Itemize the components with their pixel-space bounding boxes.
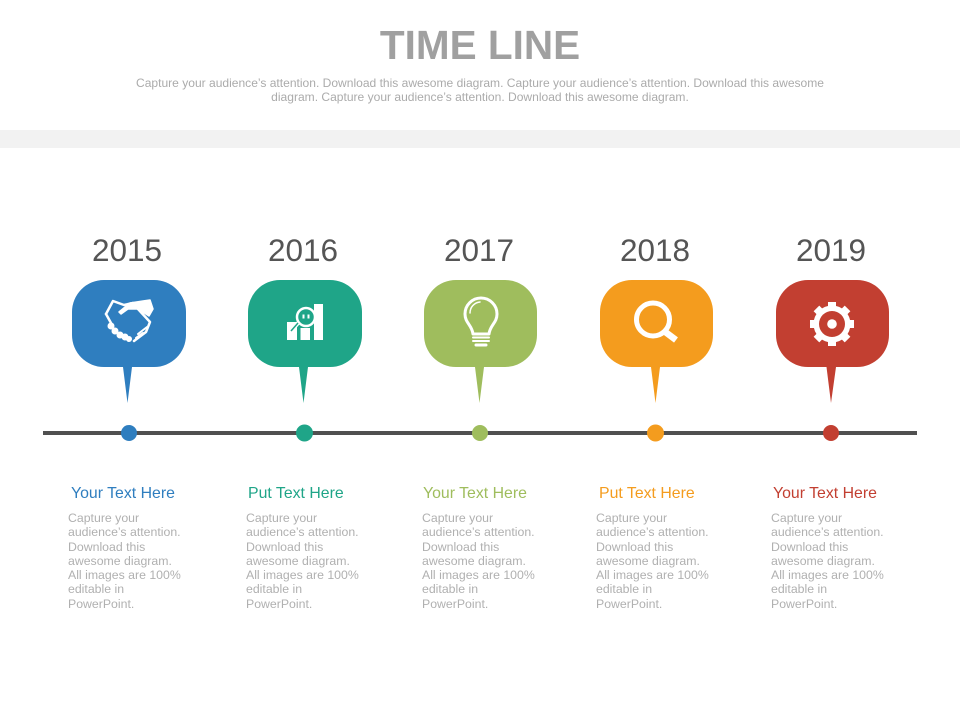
column 2019 text: editable in [771, 582, 827, 596]
column 2018 text: audience’s attention. [596, 525, 709, 539]
column 2015 text: All images are 100% [68, 568, 181, 582]
column 2016 text: PowerPoint. [246, 597, 312, 611]
icon: magnifier over bar chart [287, 304, 323, 340]
column 2015 heading: Your Text Here [71, 485, 175, 502]
column 2017 text: All images are 100% [422, 568, 535, 582]
column 2017 text: editable in [422, 582, 478, 596]
column 2018 text: PowerPoint. [596, 597, 662, 611]
column 2016 heading: Put Text Here [248, 485, 344, 502]
column 2018 text: editable in [596, 582, 652, 596]
column 2018 text: awesome diagram. [596, 554, 700, 568]
pin 2018 [600, 280, 713, 403]
pin 2017 [424, 280, 537, 403]
header band [0, 130, 960, 148]
column 2015 text: awesome diagram. [68, 554, 172, 568]
column 2017 text: Download this [422, 540, 499, 554]
pin 2019 [776, 280, 889, 403]
subtitle text: diagram. Capture your audience’s attention. Download this awesome diagram. [271, 90, 689, 104]
column 2018 text: Download this [596, 540, 673, 554]
column 2019 text: Capture your [771, 511, 842, 525]
column 2015 text: Download this [68, 540, 145, 554]
column 2016 text: All images are 100% [246, 568, 359, 582]
column 2017 text: PowerPoint. [422, 597, 488, 611]
column 2015 text [68, 511, 181, 611]
timeline axis [43, 431, 917, 435]
column 2018 text [596, 511, 709, 611]
column 2018 heading: Put Text Here [599, 485, 695, 502]
column 2016 text: editable in [246, 582, 302, 596]
marker 2019 [823, 425, 839, 441]
year 2019: 2019 [796, 232, 866, 268]
column 2015 text: Capture your [68, 511, 139, 525]
column 2016 text: Download this [246, 540, 323, 554]
icon: magnifying glass [636, 303, 676, 340]
icon: handshake [106, 300, 153, 342]
year 2017: 2017 [444, 232, 514, 268]
icon: gear [810, 302, 854, 346]
column 2017 text: Capture your [422, 511, 493, 525]
title: TIME LINE [380, 22, 580, 68]
column 2017 heading: Your Text Here [423, 485, 527, 502]
column 2016 text: audience’s attention. [246, 525, 359, 539]
column 2017 text: awesome diagram. [422, 554, 526, 568]
column 2018 text: Capture your [596, 511, 667, 525]
icon: light bulb [465, 298, 497, 345]
column 2017 text: audience’s attention. [422, 525, 535, 539]
subtitle text: Capture your audience’s attention. Download this awesome diagram. Capture your audience’s attention. Download this awesome [136, 76, 824, 90]
column 2019 heading: Your Text Here [773, 485, 877, 502]
column 2016 text: Capture your [246, 511, 317, 525]
column 2019 text: audience’s attention. [771, 525, 884, 539]
marker 2015 [121, 425, 137, 441]
column 2015 text: editable in [68, 582, 124, 596]
column 2019 text [771, 511, 884, 611]
column 2019 text: Download this [771, 540, 848, 554]
column 2018 text: All images are 100% [596, 568, 709, 582]
column 2015 text: PowerPoint. [68, 597, 134, 611]
column 2016 text: awesome diagram. [246, 554, 350, 568]
column 2019 text: awesome diagram. [771, 554, 875, 568]
column 2017 text [422, 511, 535, 611]
column 2019 text: All images are 100% [771, 568, 884, 582]
marker 2018 [647, 424, 664, 442]
marker 2016 [296, 424, 313, 442]
column 2019 text: PowerPoint. [771, 597, 837, 611]
year 2015: 2015 [92, 232, 162, 268]
pin 2016 [248, 280, 362, 403]
column 2016 text [246, 511, 359, 611]
pin 2015 [72, 280, 186, 403]
column 2015 text: audience’s attention. [68, 525, 181, 539]
year 2016: 2016 [268, 232, 338, 268]
marker 2017 [472, 425, 488, 441]
year 2018: 2018 [620, 232, 690, 268]
subtitle text [136, 76, 824, 104]
